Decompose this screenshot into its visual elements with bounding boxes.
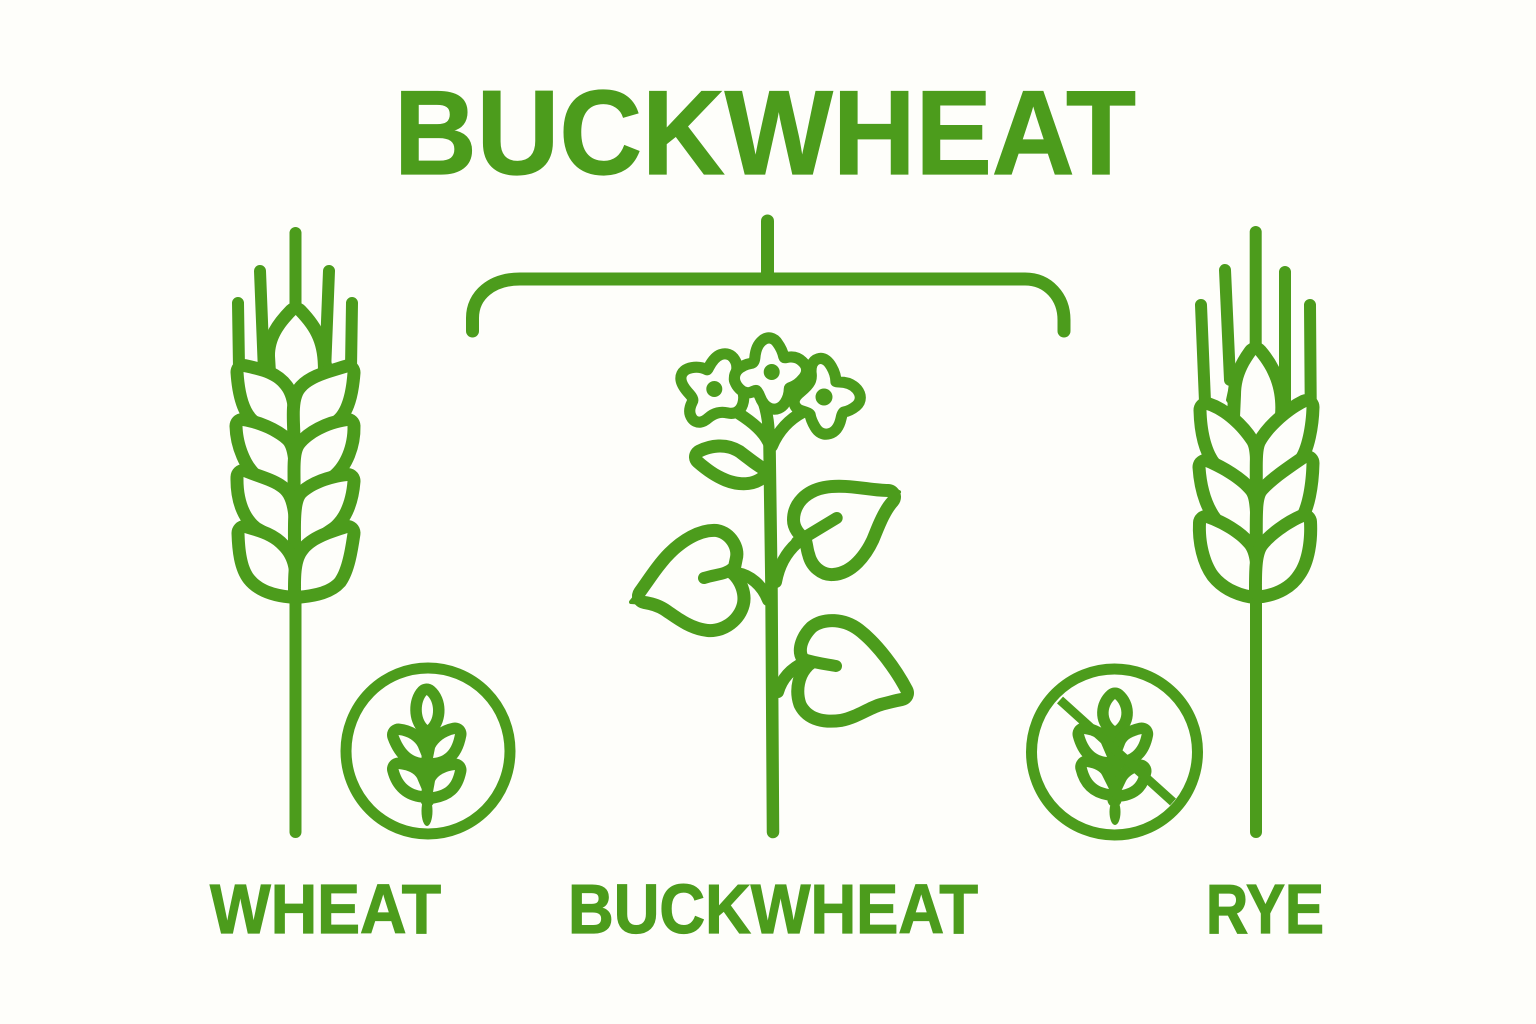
icon: crossed-out grain symbol in circle — [1032, 669, 1198, 835]
lower right leaf — [778, 627, 911, 715]
small upper leaf — [702, 452, 758, 477]
rye awn bases — [1228, 372, 1288, 420]
slash — [1060, 700, 1173, 802]
icon: buckwheat plant — [631, 343, 911, 832]
wheat awns — [238, 233, 352, 372]
title: BUCKWHEAT — [394, 66, 1136, 200]
left leaf — [631, 537, 768, 624]
icon: rye plant — [1201, 232, 1311, 832]
rye grains — [1206, 355, 1306, 590]
label: wheat: WHEAT — [210, 870, 441, 948]
wheat stem — [290, 390, 302, 832]
circle — [1032, 669, 1198, 835]
flower cluster — [686, 343, 855, 429]
icon: wheat symbol in circle — [346, 668, 510, 834]
icon: wheat plant — [238, 233, 352, 832]
flower branches — [738, 393, 803, 446]
wheat grains — [242, 315, 348, 590]
buckwheat stem — [770, 445, 773, 832]
grain sprig — [398, 695, 455, 826]
circle — [346, 668, 510, 834]
upper right leaf — [776, 486, 899, 582]
bracket connector — [472, 221, 1064, 331]
label: buckwheat: BUCKWHEAT — [568, 870, 978, 948]
rye awns — [1201, 232, 1311, 405]
label: rye: RYE — [1206, 870, 1324, 948]
grain sprig — [1084, 699, 1142, 825]
rye stem — [1250, 430, 1262, 832]
wheat awn bases — [259, 335, 331, 378]
